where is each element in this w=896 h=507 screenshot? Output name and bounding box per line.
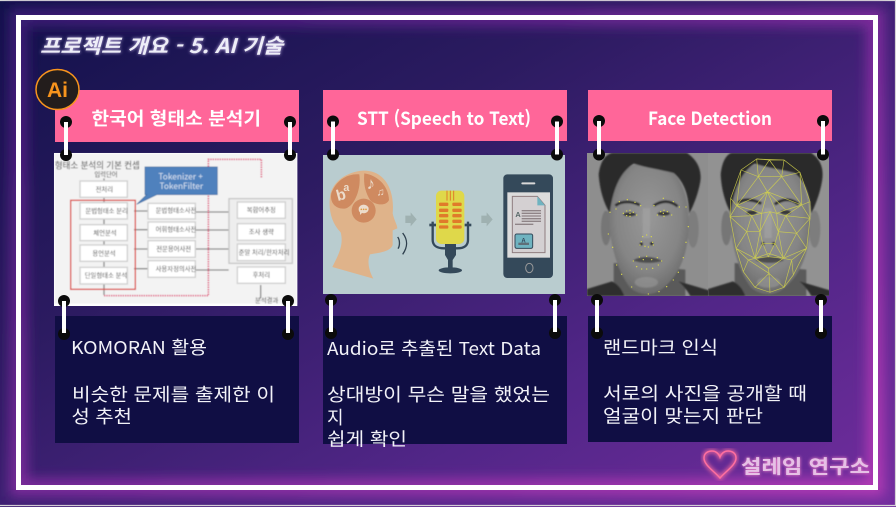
icon: neon heart [704, 451, 736, 478]
icon: head with thought lobes: a [343, 182, 349, 194]
description box [55, 295, 299, 443]
description text: 랜드마크 인식 [603, 334, 718, 360]
diagram: morphological analysis concept [54, 153, 297, 306]
description text: 비슷한 문제를 출제한 이 [72, 381, 275, 407]
connector pins: image to text [325, 294, 561, 339]
diagram: morphological analysis concept: 문법형태소 분리 [85, 206, 128, 215]
diagram: morphological analysis concept: Tokenizer + [158, 170, 203, 182]
panel: speech to text [323, 90, 567, 452]
photo: face landmarks and mesh [587, 153, 830, 296]
connector pins: image to text [58, 295, 294, 340]
icon: microphone [429, 191, 471, 273]
description text: 쉽게 확인 [327, 426, 407, 452]
description text: 서로의 사진을 공개할 때 [603, 380, 807, 406]
diagram: morphological analysis concept: 입력단어 [94, 170, 118, 179]
description box [588, 294, 832, 442]
arrow [405, 212, 417, 226]
panel: Korean morphological analyzer [54, 90, 299, 443]
icon: head with thought lobes: ♫ [377, 187, 385, 199]
description text: 상대방이 무슨 말을 했었는 [327, 381, 550, 407]
diagram: morphological analysis concept: 전문용어사전 [156, 244, 191, 253]
connector pins: header to image [60, 116, 296, 161]
arrow [481, 212, 493, 226]
header: 한국어 형태소 분석기: 한국어 형태소 분석기 [92, 105, 261, 131]
icon: Ai badge [36, 70, 79, 110]
diagram: morphological analysis concept: 단일형태소 분석 [85, 271, 127, 280]
panel: face detection [587, 90, 832, 442]
header: STT (Speech to Text): STT (Speech to Text) [357, 105, 531, 131]
diagram: morphological analysis concept: 체언분석 [93, 228, 117, 237]
icon: smartphone with document [503, 174, 553, 278]
icon: head with thought lobes: b [334, 186, 348, 205]
diagram: morphological analysis concept: 어휘형태소사전 [156, 224, 197, 233]
title: 프로젝트 개요 - 5. AI 기술 [40, 30, 285, 59]
header: Face Detection [588, 90, 832, 141]
description text [71, 334, 275, 429]
diagram: morphological analysis concept: 사용자정의사전 [156, 264, 197, 273]
illustration: voice to text on phone [323, 155, 565, 294]
diagram: morphological analysis concept: 용언분석 [92, 248, 116, 257]
description text: 지 [327, 404, 344, 430]
diagram: morphological analysis concept: 조사 생략 [249, 227, 274, 236]
title: 프로젝트 개요 - 5. AI 기술 [40, 30, 285, 59]
diagram: morphological analysis concept: 준말 처리/한자처리 [239, 247, 289, 256]
icon: smartphone with document: A [521, 238, 526, 244]
icon: head with thought lobes [330, 171, 407, 279]
diagram: morphological analysis concept: 복합어추정 [247, 205, 276, 214]
connector pins: image to text [591, 294, 827, 339]
diagram: morphological analysis concept: 후처리 [253, 270, 270, 279]
description box [323, 294, 567, 452]
description text: Audio로 추출된 Text Data [327, 335, 541, 361]
icon: Ai badge: Ai [47, 79, 68, 102]
photo: right face with yellow mesh [708, 153, 830, 296]
connector pins: header to image [327, 116, 563, 160]
icon: smartphone with document: A [515, 210, 521, 219]
photo: left face with landmark dots [587, 153, 709, 296]
description text: KOMORAN 활용 [71, 334, 207, 360]
description text: 얼굴이 맞는지 판단 [603, 402, 763, 428]
header: Face Detection: Face Detection [648, 105, 772, 131]
diagram: morphological analysis concept: 전처리 [96, 184, 113, 193]
connector pins: header to image [593, 115, 829, 160]
diagram: morphological analysis concept: TokenFilter [160, 180, 204, 192]
header: STT (Speech to Text) [323, 90, 567, 141]
description text: 성 추천 [72, 403, 132, 429]
icon: head with thought lobes: ♪ [367, 174, 375, 193]
logo text: 설레임 연구소 [741, 452, 870, 479]
description text [327, 335, 550, 452]
description text [603, 334, 807, 428]
diagram: morphological analysis concept: 문법형태소사전 [156, 206, 197, 215]
header: 한국어 형태소 분석기 [55, 90, 299, 142]
diagram: morphological analysis concept: 분석결과 [255, 296, 278, 305]
diagram: morphological analysis concept: 형태소 분석의 기본 컨셉 [55, 159, 140, 172]
logo text: 설레임 연구소 [741, 452, 870, 479]
logo: 설레임 연구소 [704, 451, 870, 479]
